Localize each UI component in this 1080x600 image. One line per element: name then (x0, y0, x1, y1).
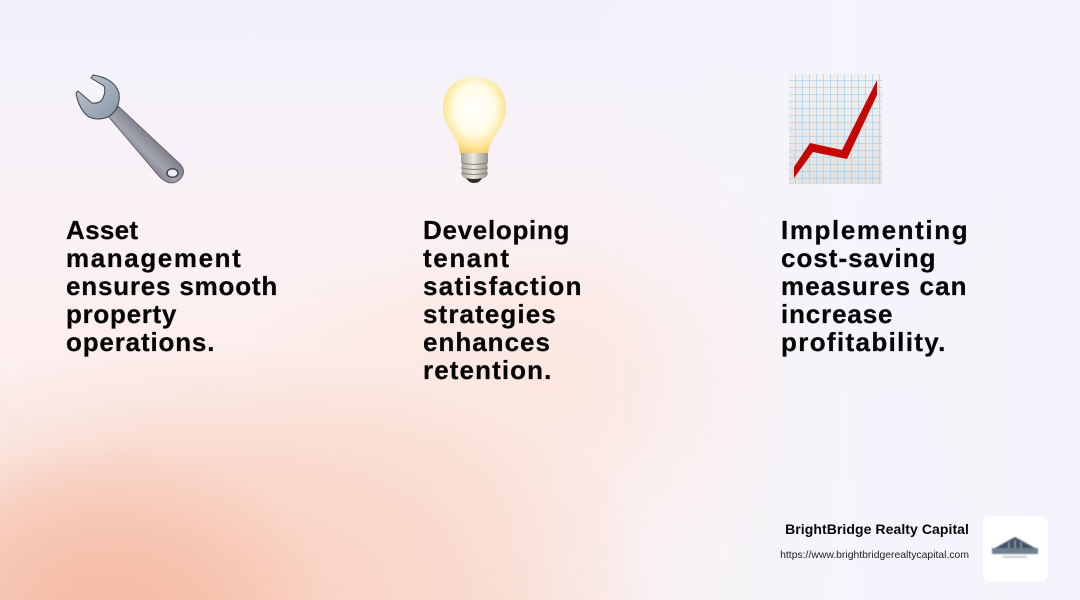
icon: logo building (991, 536, 1039, 559)
logo card (983, 516, 1048, 581)
text: asset management (66, 215, 278, 357)
text: tenant satisfaction: strategies (423, 299, 557, 329)
icon: wrench (76, 74, 184, 184)
text: cost saving: Implementing (781, 215, 969, 245)
text: tenant satisfaction: enhances (423, 327, 551, 357)
text: cost saving: cost-saving (781, 243, 936, 273)
brand name: BrightBridge Realty Capital (785, 521, 969, 537)
icon: light bulb (443, 77, 506, 183)
text: cost saving: profitability. (781, 327, 947, 357)
text: asset management: management (66, 243, 242, 273)
text: tenant satisfaction: satisfaction (423, 271, 583, 301)
website url: https://www.brightbridgerealtycapital.com (780, 550, 969, 561)
text: asset management: operations. (66, 327, 215, 357)
text: tenant satisfaction: retention. (423, 355, 552, 385)
text: cost saving: increase (781, 299, 893, 329)
icon: rising chart (789, 74, 882, 184)
text: cost saving (781, 215, 969, 357)
text: asset management: property (66, 299, 177, 329)
text: tenant satisfaction: tenant (423, 243, 511, 273)
text: tenant satisfaction: Developing (423, 215, 570, 245)
text: asset management: ensures smooth (66, 271, 278, 301)
text: tenant satisfaction (423, 215, 583, 385)
text: asset management: Asset (66, 215, 138, 245)
text: cost saving: measures can (781, 271, 968, 301)
